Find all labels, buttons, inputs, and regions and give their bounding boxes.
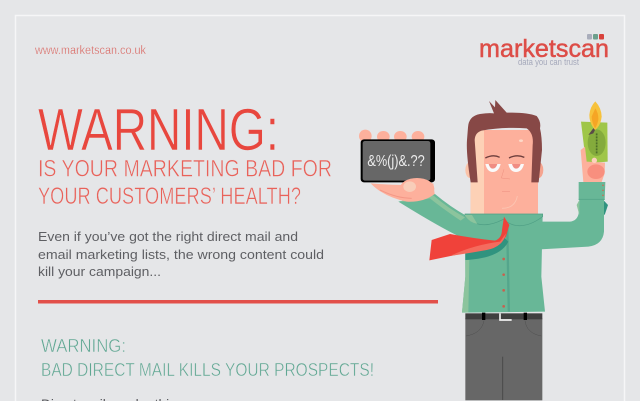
section heading: BAD DIRECT MAIL KILLS YOUR PROSPECTS!	[41, 359, 374, 380]
red divider	[38, 300, 438, 304]
intro text: Even if you’ve got the right direct mail and	[38, 229, 298, 244]
subtitle: IS YOUR MARKETING BAD FOR	[38, 156, 332, 182]
subtitle	[38, 156, 332, 210]
right arm	[540, 200, 604, 249]
holding hand	[371, 178, 435, 202]
phone	[361, 139, 435, 182]
tie	[429, 217, 509, 260]
hair	[467, 100, 542, 182]
illustration: man	[359, 100, 608, 400]
back hand fingers	[359, 130, 424, 142]
buttons	[502, 258, 505, 308]
logo tagline: data you can trust	[518, 57, 579, 67]
cuff	[577, 182, 605, 215]
left arm	[398, 194, 468, 241]
logo wordmark: marketscan	[479, 35, 609, 63]
flame	[589, 101, 602, 130]
belt	[465, 313, 542, 320]
phone: &%(j)&.??	[367, 153, 425, 170]
collar	[465, 214, 543, 226]
trousers	[465, 318, 542, 400]
intro text	[38, 229, 324, 279]
neck and face	[465, 130, 543, 215]
section heading: WARNING:	[41, 335, 126, 356]
banknote	[581, 122, 608, 163]
shirt	[462, 215, 545, 313]
intro text: email marketing lists, the wrong content could	[38, 247, 324, 262]
title: warning: WARNING:	[38, 97, 279, 163]
section heading	[41, 335, 374, 380]
eyes	[485, 156, 524, 172]
intro text: kill your campaign...	[38, 264, 161, 279]
website url: www.marketscan.co.uk	[34, 45, 146, 57]
raised hand	[581, 147, 605, 182]
raised arm back cuff	[600, 200, 608, 215]
logo colour squares	[587, 34, 604, 40]
logo: marketscan	[479, 34, 609, 67]
subtitle: YOUR CUSTOMERS’ HEALTH?	[38, 183, 301, 210]
